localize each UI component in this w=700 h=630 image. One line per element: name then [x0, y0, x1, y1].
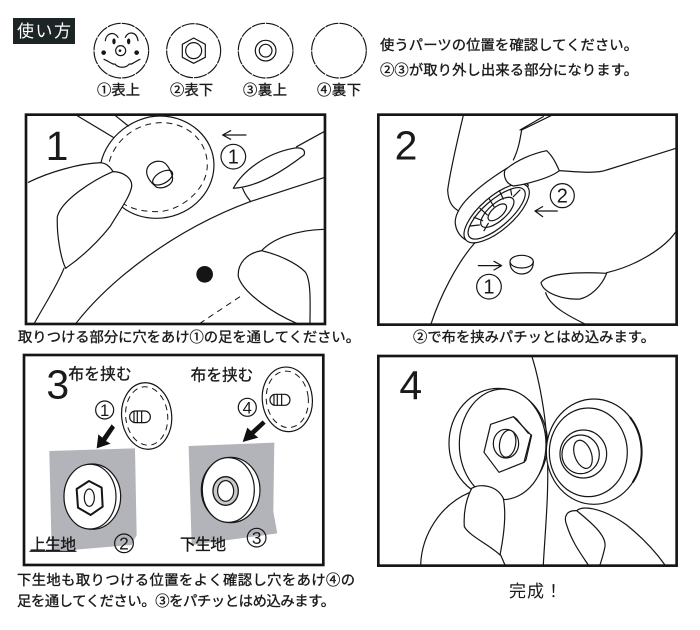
intro text: 使うパーツの位置を確認してください。: [380, 37, 638, 54]
button 1: [118, 380, 175, 452]
left finger: [28, 163, 132, 323]
icon: part 4 plain disc: [312, 23, 366, 78]
button 4: [259, 365, 316, 434]
icon: part 3 ring: [238, 23, 293, 78]
arrow: down-left: [243, 420, 266, 442]
upper finger: [504, 148, 676, 186]
arrow with number 2: [535, 184, 574, 217]
number 4: 4: [399, 362, 422, 408]
number 3: 3: [46, 362, 69, 408]
icon: part 2 hex nut: [167, 24, 221, 78]
button on upper fabric: [64, 464, 121, 529]
heading: how to use: [13, 18, 75, 44]
number 2: 2: [395, 122, 417, 168]
arrow with number 2: 2: [557, 186, 568, 208]
number 4 circle: [238, 398, 256, 417]
number 1 circle: 1: [100, 401, 109, 420]
button disc: [101, 116, 214, 218]
heading: how to use: 使い方: [17, 21, 71, 41]
number 3 circle: [247, 528, 266, 548]
number 1 circle: [96, 401, 114, 420]
part labels: [97, 82, 361, 99]
intro text: [380, 37, 638, 79]
left assembled button: [449, 388, 548, 500]
parts overview: four button parts: [94, 23, 366, 99]
button on lower fabric: [201, 457, 260, 523]
fabric swatch: upper: [49, 448, 137, 552]
part labels: ④裏下: [317, 82, 361, 99]
arrow: down-left: [97, 424, 115, 448]
number 3 circle: 3: [252, 528, 261, 548]
arrow with number 1: [221, 131, 246, 169]
hole: [196, 266, 213, 283]
part labels: ②表下: [170, 82, 213, 99]
number 2 circle: [115, 534, 133, 554]
part labels: ③裏上: [243, 82, 287, 99]
arrow with number 1: [477, 261, 502, 299]
intro text: ②③が取り外し出来る部分になります。: [380, 62, 638, 79]
number 4 circle: 4: [243, 398, 252, 417]
part labels: ①表上: [97, 82, 140, 99]
label: lower fabric: 下生地: [180, 536, 226, 554]
caption step 3: 下生地も取りつける位置をよく確認し穴をあけ④の: [17, 572, 355, 589]
panel: step 4: [378, 356, 677, 566]
tilted button: [455, 168, 538, 253]
upper right finger: [233, 132, 324, 202]
arrow with number 1: 1: [228, 147, 239, 169]
panel: step 1: [26, 115, 325, 324]
panel: step 3: [24, 355, 323, 565]
label: fabric pinch right: 布を挟む: [191, 367, 253, 385]
number 1: 1: [46, 123, 68, 169]
caption step 2: ②で布を挟みパチッとはめ込みます。: [413, 329, 655, 346]
caption: complete: 完成！: [509, 582, 562, 601]
icon: part 1 face top: [94, 23, 149, 78]
caption step 3: [17, 572, 355, 610]
lower finger: [541, 232, 676, 324]
right assembled button: [546, 399, 642, 504]
label: fabric pinch left: 布を挟む: [68, 365, 132, 383]
caption step 1: 取りつける部分に穴をあけ①の足を通してください。: [18, 329, 360, 346]
number 2 circle: 2: [119, 534, 129, 554]
fabric swatch: lower: [189, 443, 277, 545]
left finger: [421, 486, 505, 565]
arrow with number 1: 1: [483, 277, 495, 299]
right finger: [565, 508, 665, 565]
caption step 3: 足を通してください。③をパチッとはめ込みます。: [17, 593, 335, 610]
label: upper fabric: 上生地: [30, 536, 76, 554]
panel: step 2: [378, 115, 677, 325]
small cap part: [510, 255, 533, 274]
lower right finger: [238, 229, 324, 323]
